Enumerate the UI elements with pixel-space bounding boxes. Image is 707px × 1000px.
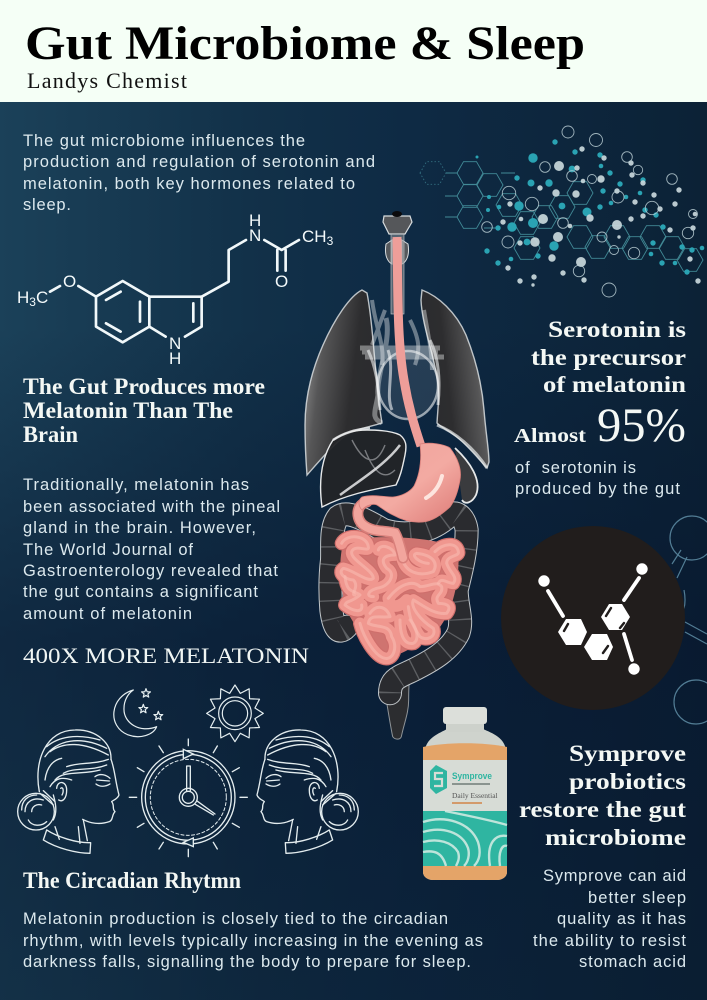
product: symprove bottle: Symprove xyxy=(452,771,492,782)
melatonin structure diagram: C xyxy=(36,288,48,307)
heading: serotonin is the precursor of melatonin: the precursor xyxy=(531,345,686,370)
symprove paragraph: stomach acid xyxy=(579,953,686,971)
heading: gut produces more melatonin xyxy=(23,374,265,447)
melatonin paragraph xyxy=(23,476,280,623)
intro text: sleep. xyxy=(23,196,71,214)
icon: sun xyxy=(207,685,263,742)
stat: almost 95%: 95% xyxy=(597,399,686,452)
melatonin paragraph: Traditionally, melatonin has xyxy=(23,476,249,494)
icon: liver and diaphragm xyxy=(321,425,487,507)
heading: gut produces more melatonin: The Gut Produces more xyxy=(23,374,265,399)
header band xyxy=(0,0,707,102)
heading: serotonin is the precursor of melatonin xyxy=(531,317,686,397)
heading: symprove probiotics: probiotics xyxy=(569,769,686,794)
melatonin structure diagram: H xyxy=(17,288,29,307)
molecule badge xyxy=(501,526,685,710)
icon: esophagus xyxy=(397,237,421,446)
molecular network decoration xyxy=(420,126,704,297)
melatonin structure diagram: O xyxy=(275,272,288,291)
melatonin structure diagram: 3 xyxy=(29,295,36,309)
intro text xyxy=(23,132,375,214)
stat: almost 95%: Almost xyxy=(514,425,586,447)
title: Gut Microbiome & Sleep xyxy=(25,17,585,70)
melatonin structure diagram: O xyxy=(63,272,76,291)
melatonin paragraph: Gastroenterology revealed that xyxy=(23,562,278,580)
circadian paragraph: rhythm, with levels typically increasing in the evening as xyxy=(23,932,483,950)
decorative microbe outlines xyxy=(670,516,707,724)
intro text: The gut microbiome influences the xyxy=(23,132,305,150)
icon: large intestine xyxy=(330,513,467,739)
melatonin structure diagram: H xyxy=(249,211,261,230)
serotonin caption: produced by the gut xyxy=(515,480,680,498)
serotonin caption: of serotonin is xyxy=(515,459,636,477)
symprove paragraph: the ability to resist xyxy=(533,932,686,950)
melatonin structure diagram: N xyxy=(169,334,181,353)
product: symprove bottle: Daily Essential xyxy=(452,791,498,800)
circadian paragraph: darkness falls, signalling the body to prepare for sleep. xyxy=(23,953,471,971)
icon: moon and stars xyxy=(114,689,163,737)
heading: symprove probiotics: restore the gut xyxy=(519,797,686,822)
heading: symprove probiotics xyxy=(519,741,686,850)
stat: almost 95% xyxy=(514,399,686,452)
melatonin paragraph: amount of melatonin xyxy=(23,605,192,623)
heading: symprove probiotics: Symprove xyxy=(569,741,686,766)
melatonin structure diagram: N xyxy=(249,226,261,245)
icon: right head xyxy=(257,730,358,853)
symprove paragraph: better sleep xyxy=(588,889,686,907)
melatonin paragraph: gland in the brain. However, xyxy=(23,519,256,537)
melatonin structure diagram: CH xyxy=(302,227,327,246)
product: symprove bottle xyxy=(423,707,507,880)
stat: 400x more melatonin: 400X MORE MELATONIN xyxy=(23,643,309,668)
subtitle: Landys Chemist xyxy=(27,68,187,93)
intro text: melatonin, both key hormones related to xyxy=(23,175,355,193)
melatonin paragraph: The World Journal of xyxy=(23,541,193,559)
heading: serotonin is the precursor of melatonin: of melatonin xyxy=(543,372,686,397)
icon: clock xyxy=(129,739,247,857)
symprove paragraph: quality as it has xyxy=(557,910,686,928)
anatomy illustration xyxy=(305,211,489,739)
serotonin caption xyxy=(515,459,680,498)
symprove paragraph: Symprove can aid xyxy=(543,867,686,885)
icon: throat and trachea xyxy=(383,211,412,314)
icon: left head xyxy=(18,730,119,853)
heading: circadian rhythm: The Circadian Rhytmn xyxy=(23,868,241,893)
intro text: production and regulation of serotonin and xyxy=(23,153,375,171)
circadian paragraph: Melatonin production is closely tied to the circadian xyxy=(23,910,448,928)
heading: gut produces more melatonin: Melatonin Than The xyxy=(23,398,233,423)
melatonin paragraph: been associated with the pineal xyxy=(23,498,280,516)
melatonin structure diagram: 3 xyxy=(327,234,334,248)
melatonin paragraph: the gut contains a significant xyxy=(23,583,258,601)
icon: lungs xyxy=(305,290,489,475)
heading: symprove probiotics: microbiome xyxy=(545,825,686,850)
heading: serotonin is the precursor of melatonin: Serotonin is xyxy=(548,317,686,342)
icon: small intestine xyxy=(340,537,459,658)
circadian paragraph xyxy=(23,910,483,971)
icon: stomach and duodenum xyxy=(358,443,461,558)
symprove paragraph xyxy=(533,867,686,971)
icon: heart and airways xyxy=(360,300,444,423)
melatonin structure diagram: H xyxy=(169,349,181,368)
circadian rhythm illustration xyxy=(18,685,358,857)
heading: gut produces more melatonin: Brain xyxy=(23,422,78,447)
melatonin structure diagram xyxy=(17,211,334,368)
